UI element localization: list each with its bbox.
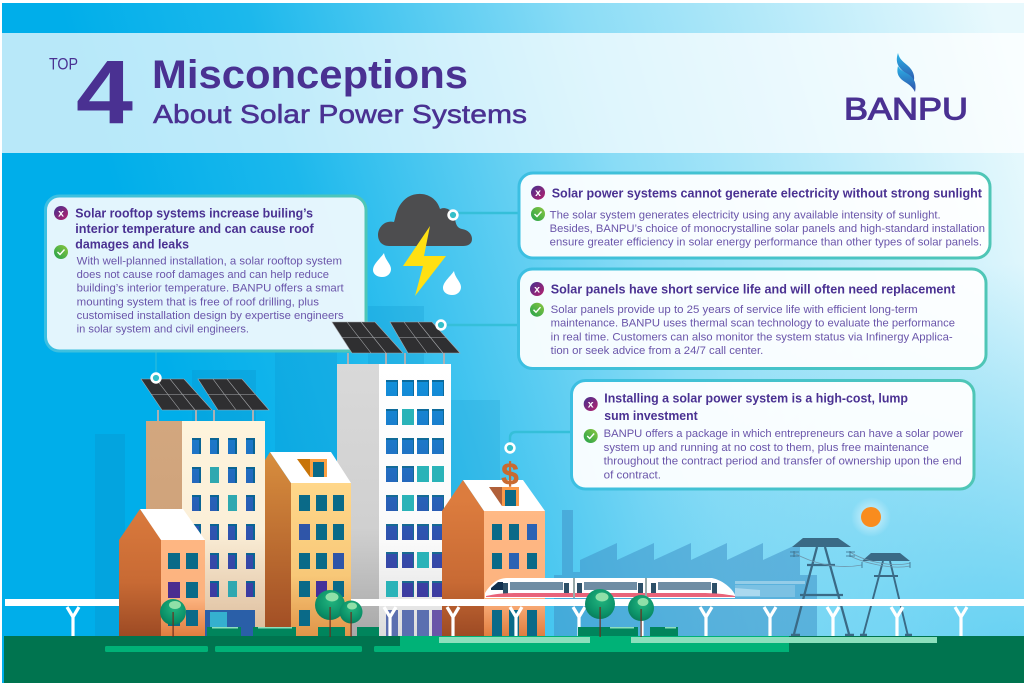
body text 1: in solar system and civil engineers. [77, 324, 249, 336]
icon: rain drop left [373, 253, 391, 277]
windows [299, 495, 344, 626]
panel: misconception 2 sunlight [519, 173, 990, 258]
tree 2 [315, 590, 345, 637]
body text 3: in real time. Customers can also monitor the system status via Infinergy Applica- [551, 331, 953, 343]
body text 3 [551, 304, 955, 357]
windows [192, 438, 255, 597]
icon: storm cloud [373, 194, 472, 296]
icon: check 3 [530, 303, 544, 317]
body text 1: building’s interior temperature. BANPU offers a smart [77, 283, 344, 295]
panel: misconception 3 service life [518, 269, 986, 368]
body text 4: of contract. [604, 469, 661, 481]
dormer [489, 487, 519, 506]
bushes [207, 627, 678, 637]
connector dots [152, 211, 514, 452]
body text 2: Besides, BANPU’s choice of monocrystalline solar panels and high-standard installation [550, 223, 985, 235]
icon: cross 1: x [58, 208, 64, 220]
heading 2: Solar power systems cannot generate electricity without strong sunlight [552, 186, 983, 201]
heading 1: damages and leaks [75, 236, 189, 251]
ground [4, 636, 1024, 683]
panel: misconception 4 cost [572, 380, 974, 489]
heading 4 [604, 391, 908, 423]
icon: cross 3 [530, 282, 544, 296]
heading 3: Solar panels have short service life and will often need replacement [551, 282, 956, 297]
door [205, 610, 255, 637]
heading 4: Installing a solar power system is a high-cost, lump [604, 391, 908, 406]
solar panels: cream block [141, 379, 269, 410]
title: Misconceptions [152, 53, 468, 97]
icon: cross 2: x [535, 187, 541, 199]
heading 1: interior temperature and can cause roof [75, 221, 314, 236]
icon: cross 2 [531, 186, 545, 200]
solar panels: tower [332, 322, 460, 353]
power pylons [790, 538, 912, 636]
building: front left house [119, 509, 205, 637]
body text 1: mounting system that is free of roof drilling, plus [77, 296, 320, 308]
pillars [67, 607, 967, 637]
icon: lightning bolt [403, 226, 446, 296]
elevated railway [5, 599, 1024, 637]
train [485, 578, 805, 598]
trees [160, 589, 654, 637]
icon: check 2 [531, 207, 545, 221]
tree 1 [160, 599, 186, 637]
title: TOP [49, 54, 78, 74]
dormer [297, 459, 327, 477]
title: About Solar Power Systems [153, 99, 527, 129]
body text 1: does not cause roof damages and can help reduce [77, 269, 329, 281]
header band [2, 33, 1024, 153]
body text 4 [604, 428, 964, 481]
body text 4: system up and running at no cost to them, plus free maintenance [604, 442, 929, 454]
windows [168, 553, 198, 626]
icon: check 4 [584, 429, 598, 443]
tree 5 [628, 595, 654, 637]
title [49, 43, 527, 143]
panel: misconception 1 roof [46, 196, 366, 351]
building: cream block [146, 410, 265, 637]
icon: cross 4 [584, 397, 598, 411]
body text 2 [550, 209, 985, 249]
windows [386, 380, 444, 637]
logo: BANPU: BANPU [844, 90, 968, 126]
icon: rain drop right [443, 271, 461, 295]
body text 3: Solar panels provide up to 25 years of service life with efficient long-term [551, 304, 918, 316]
heading 1: Solar rooftop systems increase builing’s [75, 206, 313, 221]
body text 2: The solar system generates electricity using any available intensity of sunlight. [550, 209, 941, 221]
building: tall white tower [337, 353, 451, 637]
body text 3: tion or seek advice from a 24/7 call center. [551, 345, 763, 357]
body text 4: throughout the contract period and transfer of ownership upon the end [604, 456, 962, 468]
tree 3 [340, 600, 362, 637]
title: 4 [76, 43, 133, 143]
body text 4: BANPU offers a package in which entrepreneurs can have a solar power [604, 428, 964, 440]
logo: BANPU [844, 53, 968, 126]
heading 4: sum investment [604, 408, 698, 423]
icon: check 1 [54, 245, 68, 259]
body text 3: maintenance. BANPU uses thermal scan technology to evaluate the performance [551, 318, 955, 330]
body text 1 [77, 255, 344, 336]
body text 1: With well-planned installation, a solar rooftop system [77, 255, 342, 267]
icon: cross 1 [54, 206, 68, 220]
connector lines [156, 213, 570, 446]
tree 4 [585, 589, 615, 637]
building: yellow house [265, 452, 351, 637]
icon: dollar sign: $ [501, 456, 519, 491]
building: orange house with dollar sign [442, 456, 545, 637]
sun [851, 497, 891, 537]
factory silhouette [554, 510, 817, 637]
windows [492, 524, 537, 637]
heading 1 [75, 206, 314, 251]
body text 2: ensure greater efficiency in solar energy performance than other types of solar panels. [550, 237, 982, 249]
skyline silhouettes [95, 306, 500, 637]
body text 1: customised installation design by expertise engineers [77, 310, 344, 322]
icon: cross 4: x [588, 398, 594, 410]
icon: cross 3: x [534, 284, 540, 296]
